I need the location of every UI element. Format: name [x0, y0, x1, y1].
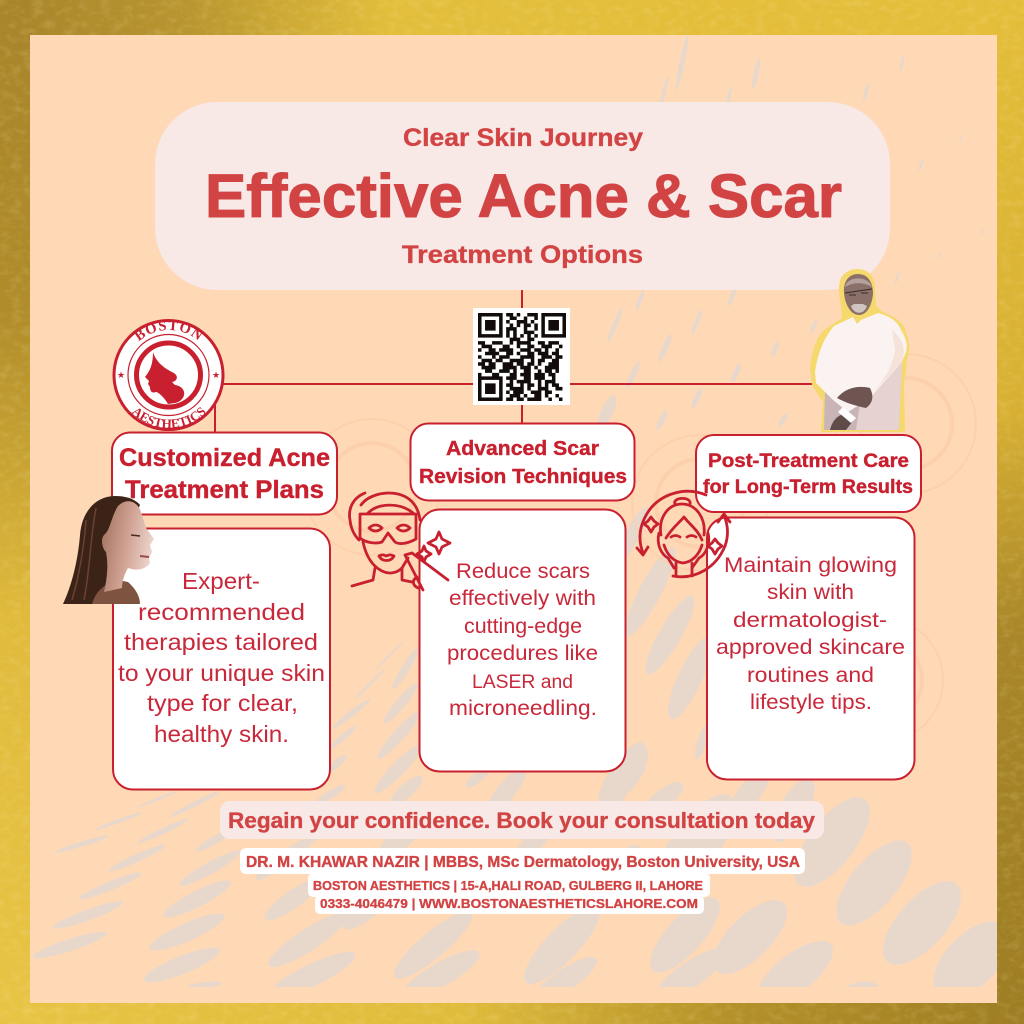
- doctor yellow cutout outline: [810, 269, 909, 432]
- card 3 body: routines and: [747, 664, 874, 687]
- card 3 body: approved skincare: [716, 636, 905, 659]
- doctor lower kurta: [824, 362, 902, 430]
- logo text top: BOSTON: [135, 322, 202, 342]
- connector lines: [215, 290, 820, 432]
- icon: face with goggles and laser tool: [350, 493, 450, 590]
- doctor upper kurta: [815, 313, 907, 412]
- card 2 heading: [410, 424, 634, 500]
- card 1 body: healthy skin.: [154, 721, 289, 747]
- card 2 body: cutting-edge: [464, 615, 582, 638]
- face silhouette: [145, 352, 184, 404]
- card 2 body: microneedling.: [449, 697, 597, 720]
- clinic address: [308, 873, 710, 897]
- card 1 body: recommended: [138, 599, 305, 625]
- card 1 body: type for clear,: [147, 690, 298, 716]
- card 2 body: LASER and: [472, 672, 573, 693]
- card 3 body: [707, 518, 914, 780]
- clinic address: BOSTON AESTHETICS | 15-A,HALI ROAD, GULBERG II, LAHORE: [313, 878, 703, 893]
- card 2 body: effectively with: [449, 587, 596, 610]
- card 3 heading: for Long-Term Results: [703, 477, 913, 498]
- card 3 body: skin with: [767, 581, 854, 604]
- card 3 body: Maintain glowing: [724, 554, 897, 577]
- subtitle: Treatment Options: [402, 241, 643, 269]
- doctor sleeve shading: [868, 330, 904, 398]
- photo: doctor in white kurta: [810, 269, 909, 432]
- card 3 body: lifestyle tips.: [750, 691, 872, 714]
- icon: face care with circular arrows: [637, 491, 730, 577]
- doctor credentials: [240, 848, 805, 874]
- card 3 heading: Post-Treatment Care: [708, 451, 909, 472]
- contact details: [240, 848, 805, 914]
- card 2 body: [420, 510, 626, 772]
- logo text bottom: AESTHETICS: [132, 407, 206, 428]
- card 2 heading: Advanced Scar: [446, 437, 599, 460]
- card 1 body: to your unique skin: [118, 660, 325, 686]
- logo: Boston Aesthetics: [112, 319, 224, 431]
- doctor credentials: DR. M. KHAWAR NAZIR | MBBS, MSc Dermatology, Boston University, USA: [246, 854, 800, 871]
- card 1 heading: [112, 432, 337, 514]
- card 3 body: dermatologist-: [733, 609, 887, 632]
- card 1 body: [113, 528, 330, 790]
- call to action: [220, 801, 824, 839]
- phone and website: 0333-4046479 | WWW.BOSTONAESTHETICSLAHORE.COM: [320, 896, 698, 911]
- card 1 heading: Customized Acne: [119, 444, 330, 472]
- doctor glasses: [845, 289, 872, 295]
- doctor lower hand: [830, 414, 853, 430]
- doctor cuff: [838, 407, 856, 423]
- card 2 body: Reduce scars: [456, 560, 590, 583]
- doctor upper hand: [837, 387, 872, 408]
- logo star right: ★: [212, 370, 220, 380]
- doctor lower kurta light panel: [856, 362, 902, 430]
- header panel: [155, 102, 890, 290]
- photo: woman in profile: [63, 496, 154, 604]
- doctor head: [844, 274, 873, 315]
- eyebrow heading: Clear Skin Journey: [403, 124, 643, 152]
- card 1 body: Expert-: [182, 568, 260, 594]
- main title: Effective Acne & Scar: [205, 162, 842, 230]
- doctor beard: [851, 304, 867, 313]
- card 2 body: procedures like: [447, 642, 598, 665]
- card 2 heading: Revision Techniques: [419, 465, 627, 488]
- card 1 body: therapies tailored: [124, 629, 318, 655]
- watermark stamps: [304, 354, 976, 743]
- QR code: [473, 308, 570, 405]
- logo stars: ★: [117, 370, 125, 380]
- card 3 heading: [696, 435, 921, 512]
- doctor bald top: [845, 278, 872, 287]
- card 1 heading: Treatment Plans: [125, 476, 324, 504]
- call to action: Regain your confidence. Book your consultation today: [228, 808, 815, 833]
